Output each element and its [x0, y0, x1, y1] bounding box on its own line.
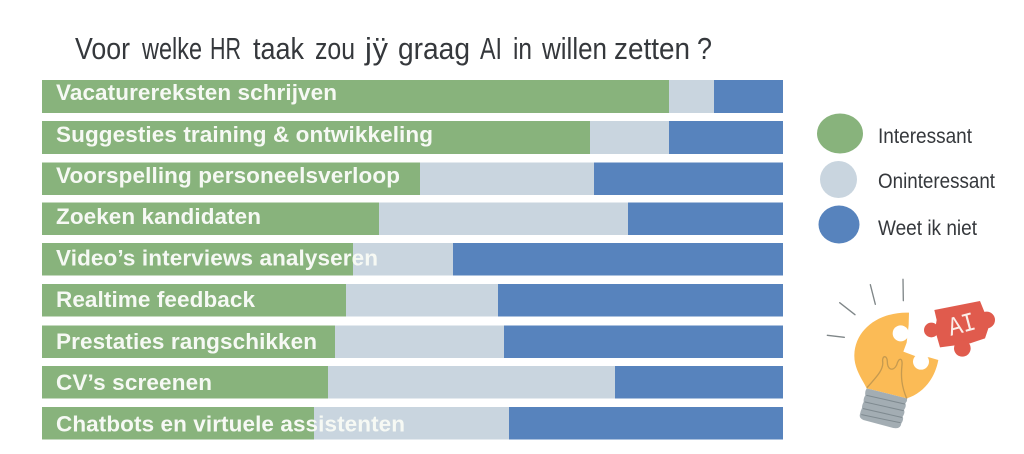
title: AI	[480, 31, 502, 66]
legend item: Interessant	[817, 114, 972, 154]
legend item: Weet ik niet	[818, 206, 977, 244]
bar: Realtime feedback: Realtime feedback	[56, 287, 255, 312]
bar: Suggesties training & ontwikkeling: Suggesties training & ontwikkeling	[56, 122, 433, 147]
icon: light bulb with AI puzzle piece	[827, 279, 995, 428]
title: zetten	[614, 31, 690, 66]
icon: puzzle notches	[893, 325, 929, 370]
title: taak	[253, 31, 304, 66]
bar: Voorspelling personeelsverloop	[42, 162, 783, 195]
legend item: Weet ik niet: Weet ik niet	[878, 217, 977, 240]
bar: Vacaturereksten schrijven	[42, 80, 783, 113]
icon: AI puzzle piece: AI	[945, 309, 979, 345]
bar: Zoeken kandidaten: Zoeken kandidaten	[56, 204, 261, 229]
bar: Chatbots en virtuele assistenten: Chatbots en virtuele assistenten	[56, 412, 405, 436]
bar: Voorspelling personeelsverloop: Voorspelling personeelsverloop	[56, 163, 400, 188]
bar: CV's screenen: CV’s screenen	[56, 370, 212, 395]
title: willen	[541, 31, 607, 66]
icon: bulb glass	[854, 313, 938, 398]
title: ?	[697, 31, 712, 66]
legend	[817, 114, 995, 244]
title: welke	[141, 31, 202, 66]
legend item: Oninteressant: Oninteressant	[878, 170, 995, 193]
bar: Prestaties rangschikken: Prestaties rangschikken	[56, 329, 317, 354]
bar: CV's screenen	[42, 366, 783, 398]
icon: light rays	[827, 279, 903, 337]
bar: Vacaturereksten schrijven: Vacaturereksten schrijven	[56, 80, 337, 105]
title: jÿ	[364, 31, 388, 66]
icon: AI puzzle piece	[924, 301, 995, 357]
title	[75, 31, 712, 66]
legend item: Interessant: Interessant	[878, 125, 972, 148]
stacked bar chart	[42, 80, 783, 440]
bar: Prestaties rangschikken	[42, 326, 783, 358]
title: in	[513, 31, 532, 66]
icon: filament	[867, 357, 907, 398]
legend item: Oninteressant	[820, 161, 995, 198]
bar: Realtime feedback	[42, 284, 783, 316]
title: graag	[398, 31, 470, 66]
bar: Chatbots en virtuele assistenten	[42, 407, 783, 440]
bar: Suggesties training & ontwikkeling	[42, 121, 783, 154]
bar: Video's interviews analyseren: Video’s interviews analyseren	[56, 246, 378, 270]
title: Voor	[75, 31, 130, 66]
title: zou	[315, 31, 355, 66]
bar: Video's interviews analyseren	[42, 243, 783, 276]
icon: bulb base	[860, 388, 907, 428]
title: HR	[210, 31, 241, 66]
bar: Zoeken kandidaten	[42, 202, 783, 235]
